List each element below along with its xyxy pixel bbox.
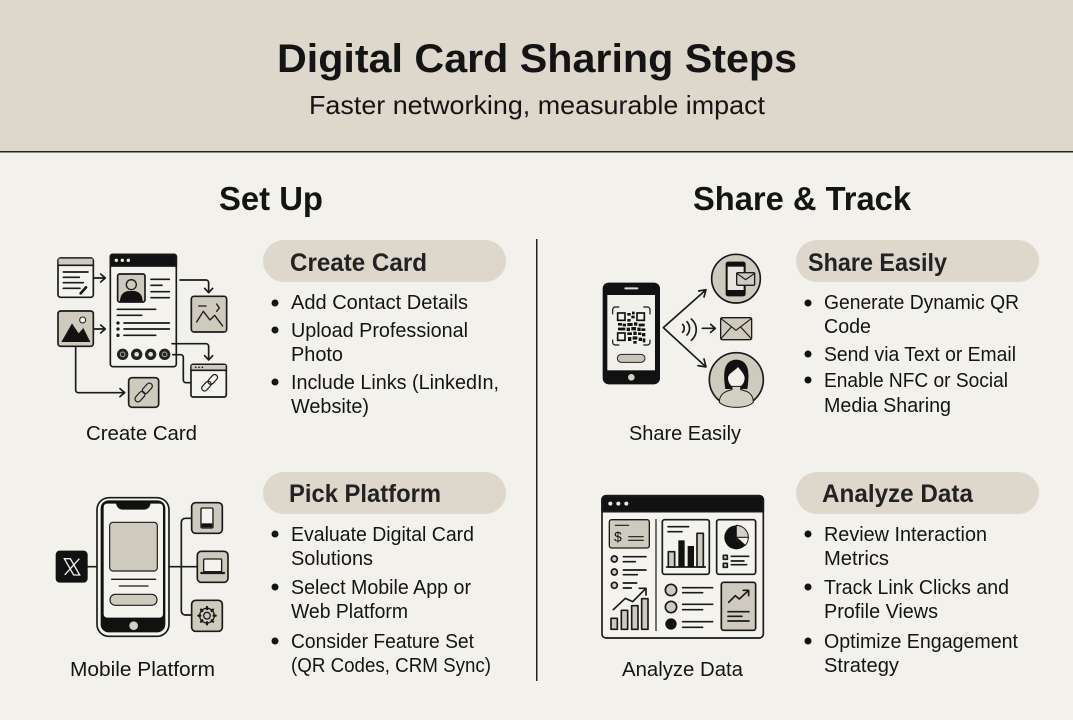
laptop tile — [197, 551, 228, 582]
bullets: Pick Platform: Select Mobile App or — [291, 576, 471, 599]
panel: Pick Platform — [56, 472, 506, 681]
bullets: Pick Platform: Solutions — [291, 547, 373, 570]
panel: Share Easily — [603, 240, 1039, 445]
main card — [110, 254, 176, 367]
caption: Share Easily: Share Easily — [629, 422, 742, 445]
browser link tile — [191, 364, 226, 397]
icon: share via QR — [603, 254, 763, 407]
bullets: Create Card: Include Links (LinkedIn, — [291, 371, 499, 394]
revenue tile — [609, 520, 649, 548]
phone with QR code — [603, 283, 660, 384]
phone — [97, 498, 169, 636]
arrows and NFC waves — [663, 290, 715, 367]
pill heading: Share Easily — [796, 240, 1039, 282]
column heading: Share & Track: Share & Track — [693, 180, 912, 217]
column heading: Set Up: Set Up — [219, 180, 323, 217]
header band — [0, 0, 1073, 152]
device tile — [192, 503, 222, 533]
bar chart tile — [662, 520, 709, 574]
bullets: Share Easily — [804, 291, 1019, 417]
envelope — [721, 318, 752, 340]
caption: Mobile Platform: Mobile Platform — [70, 658, 215, 681]
pill heading: Create Card — [263, 240, 506, 282]
pill heading: Create Card: Create Card — [290, 249, 427, 277]
form tile — [58, 258, 93, 297]
bullets: Create Card — [272, 291, 499, 418]
lower list — [665, 584, 713, 630]
bullets: Share Easily: Code — [824, 315, 871, 338]
bullets: Share Easily: Generate Dynamic QR — [824, 291, 1019, 314]
bullets: Pick Platform — [272, 523, 491, 677]
chart tile — [191, 296, 227, 332]
dashboard window — [602, 496, 763, 638]
bullets: Pick Platform: Evaluate Digital Card — [291, 523, 474, 546]
connector arrows — [76, 274, 213, 397]
X badge — [56, 551, 88, 583]
bullets: Pick Platform: (QR Codes, CRM Sync) — [291, 654, 491, 677]
bullets: Pick Platform: Consider Feature Set — [291, 630, 474, 653]
icon: analytics dashboard — [602, 496, 763, 638]
bullets: Share Easily: Enable NFC or Social — [824, 369, 1008, 392]
pill heading: Analyze Data: Analyze Data — [822, 480, 974, 508]
panel: Create Card — [58, 240, 506, 445]
bullets: Analyze Data — [804, 523, 1018, 677]
bullets: Create Card: Add Contact Details — [291, 291, 468, 314]
bullets: Create Card: Upload Professional — [291, 319, 468, 342]
bullets: Create Card: Website) — [291, 395, 369, 418]
panel: Analyze Data — [602, 472, 1039, 681]
bullets: Analyze Data: Profile Views — [824, 600, 938, 623]
subtitle: Faster networking, measurable impact — [309, 90, 766, 120]
bullets: Pick Platform: Web Platform — [291, 600, 408, 623]
pill heading: Pick Platform — [263, 472, 506, 514]
bullets: Analyze Data: Review Interaction — [824, 523, 987, 546]
icon: card with connected items — [58, 254, 227, 407]
caption: Create Card: Create Card — [86, 422, 197, 445]
left list with bar chart — [611, 556, 648, 629]
bullets: Analyze Data: Metrics — [824, 547, 889, 570]
message circle — [712, 254, 760, 303]
bullets: Analyze Data: Track Link Clicks and — [824, 576, 1009, 599]
icon: mobile platform — [56, 498, 228, 636]
person circle — [709, 353, 763, 407]
bullets: Analyze Data: Strategy — [824, 654, 900, 677]
image tile — [58, 311, 93, 346]
connectors — [87, 518, 198, 615]
settings tile — [192, 600, 222, 631]
link tile — [129, 378, 159, 407]
trend tile — [721, 582, 756, 630]
bullets: Share Easily: Send via Text or Email — [824, 343, 1016, 366]
pill heading: Pick Platform: Pick Platform — [289, 480, 441, 508]
pie chart tile — [717, 520, 756, 574]
caption: Analyze Data: Analyze Data — [622, 658, 744, 681]
bullets: Create Card: Photo — [291, 343, 343, 366]
bullets: Analyze Data: Optimize Engagement — [824, 630, 1018, 653]
pill heading: Analyze Data — [796, 472, 1039, 514]
bullets: Share Easily: Media Sharing — [824, 394, 951, 417]
pill heading: Share Easily: Share Easily — [808, 249, 947, 277]
revenue tile: $ — [614, 529, 622, 545]
title: Digital Card Sharing Steps — [277, 37, 797, 81]
